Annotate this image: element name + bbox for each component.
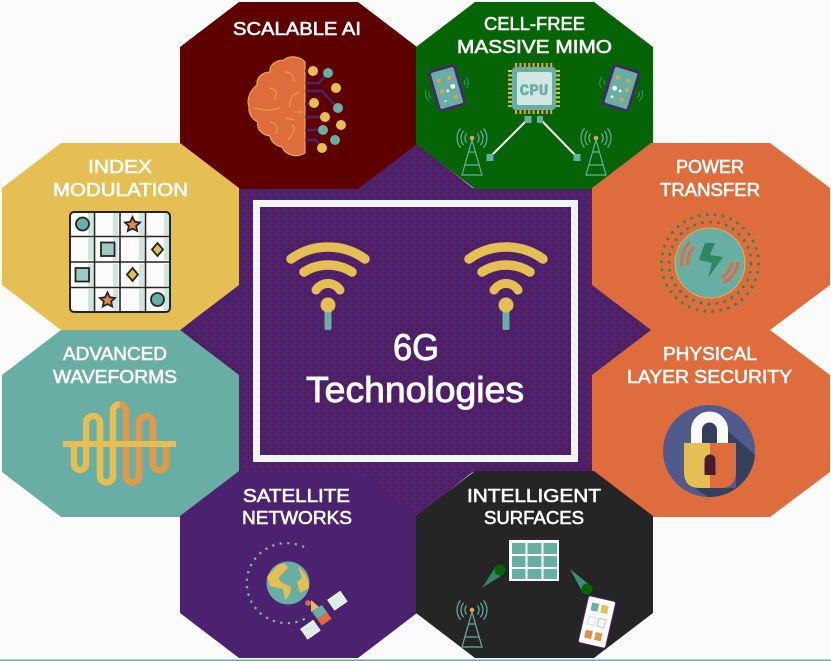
heading: cell-free massive MIMO: CELL-FREE: [484, 14, 585, 34]
icon: waveform: [63, 404, 176, 483]
icon: brain with circuit: [248, 57, 346, 156]
icon: vibration marks: [425, 77, 643, 101]
heading: power transfer: POWER: [676, 157, 744, 177]
icon: satellite: [301, 591, 347, 639]
icon: right signal beam: [570, 569, 592, 594]
icon: wireless power: [662, 214, 758, 312]
icon: right phone: [603, 65, 639, 111]
panel: intelligent surfaces: [416, 471, 653, 658]
heading: index modulation: INDEX: [88, 157, 152, 177]
icon: earth and orbit: [247, 543, 310, 623]
heading: satellite networks: NETWORKS: [242, 508, 352, 528]
heading: cell-free massive MIMO: MASSIVE MIMO: [457, 37, 612, 57]
title: 6G: [393, 327, 439, 368]
icon: right wifi: [469, 247, 543, 330]
icon: left wifi: [291, 247, 365, 330]
icon: left tower: [457, 128, 487, 175]
heading: satellite networks: [242, 486, 352, 528]
icon: modulation grid: [69, 211, 171, 313]
panel: satellite networks: [180, 471, 417, 658]
icon: left phone: [429, 65, 465, 111]
heading: physical layer security: [627, 344, 792, 387]
heading: scalable AI: SCALABLE AI: [233, 19, 361, 39]
panel: power transfer: [592, 143, 830, 330]
title: [306, 327, 524, 410]
central star background: [180, 143, 652, 517]
heading: physical layer security: LAYER SECURITY: [627, 367, 792, 387]
icon: reflecting surface: [509, 540, 559, 581]
icon: CPU chip: CPU: [520, 82, 548, 100]
heading: intelligent surfaces: [467, 486, 601, 528]
heading: power transfer: [660, 157, 760, 200]
heading: satellite networks: SATELLITE: [243, 486, 350, 506]
icon: phone: [578, 595, 616, 649]
panel: physical layer security: [592, 330, 830, 517]
icon: connection links: [486, 116, 580, 161]
heading: power transfer: TRANSFER: [660, 180, 760, 200]
heading: cell-free massive MIMO: [457, 14, 612, 57]
heading: index modulation: MODULATION: [53, 180, 188, 200]
heading: index modulation: [53, 157, 188, 200]
heading: advanced waveforms: [53, 344, 177, 387]
icon: padlock: [663, 405, 755, 497]
heading: intelligent surfaces: INTELLIGENT: [467, 486, 601, 506]
heading: advanced waveforms: WAVEFORMS: [53, 367, 177, 387]
centre frame: [256, 204, 574, 458]
heading: physical layer security: PHYSICAL: [663, 344, 757, 364]
panel: advanced waveforms: [2, 330, 239, 517]
title: Technologies: [306, 369, 524, 410]
heading: intelligent surfaces: SURFACES: [484, 508, 584, 528]
icon: left signal beam: [482, 564, 506, 588]
icon: CPU chip: [510, 65, 558, 112]
icon: right tower: [581, 128, 611, 175]
icon: tower: [457, 600, 487, 647]
panel: index modulation: [2, 143, 239, 330]
heading: advanced waveforms: ADVANCED: [63, 344, 167, 364]
panel: scalable AI: [180, 2, 417, 189]
panel: cell-free massive MIMO: [416, 2, 653, 189]
